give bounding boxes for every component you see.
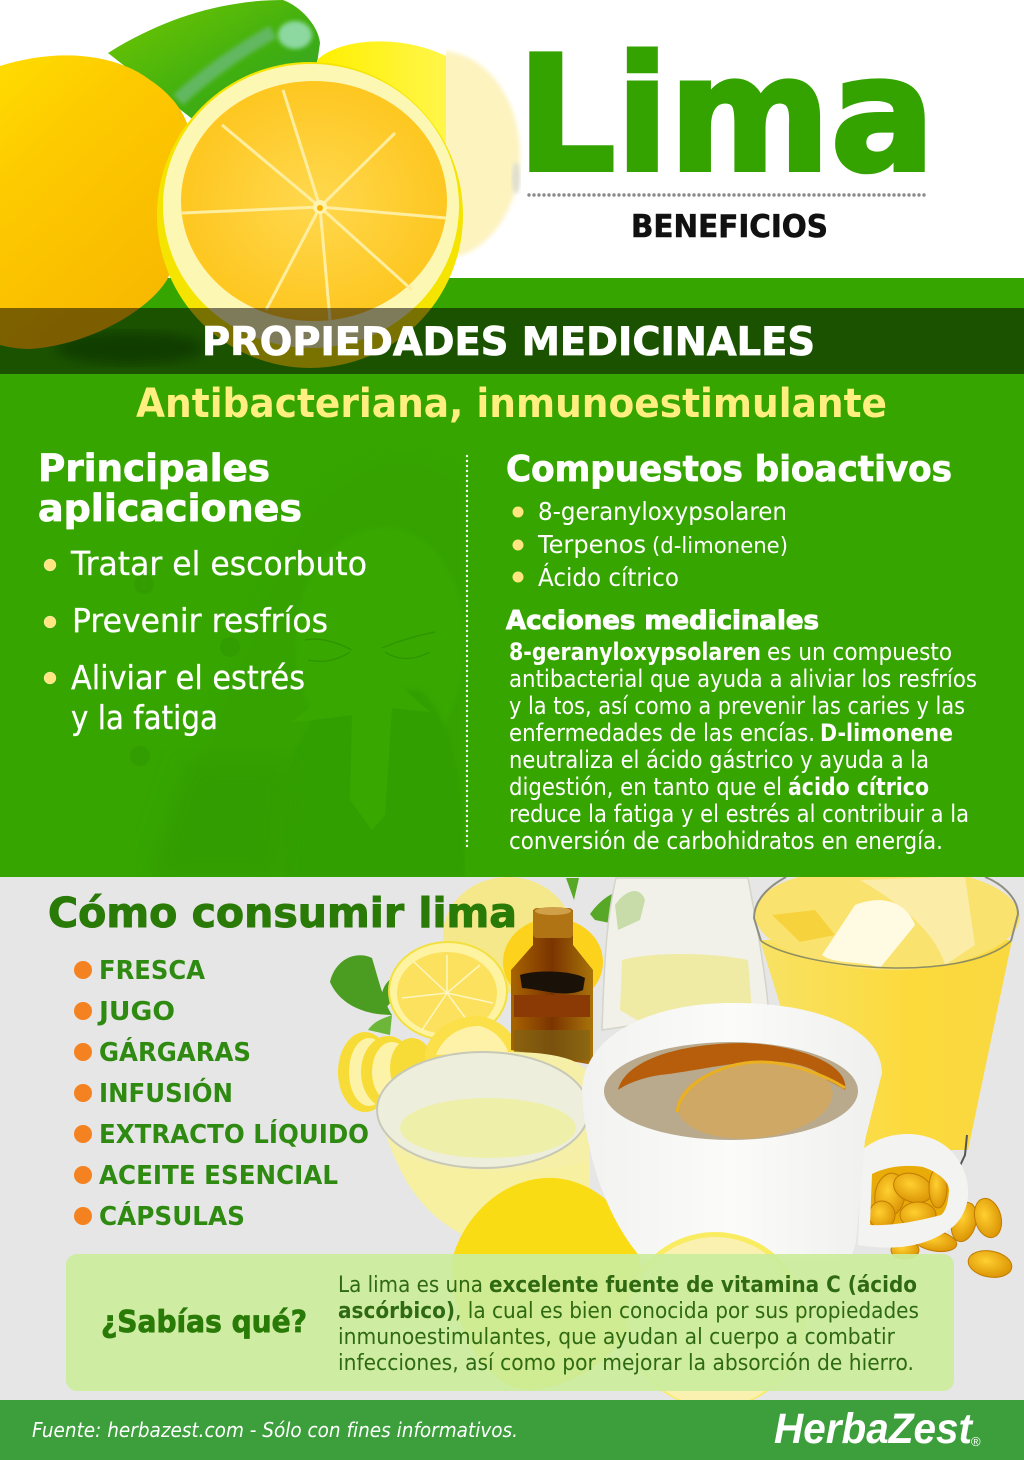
- leaves: [330, 878, 620, 1035]
- leaf: [108, 0, 320, 125]
- list: bioactive compounds: Terpenos: [537, 530, 646, 559]
- panel: medicinal properties green background: [0, 278, 1024, 877]
- photo: sneezing woman silhouette: [144, 592, 435, 765]
- subheading: Antibacteriana, inmunoestimulante: Antibacteriana, inmunoestimulante: [136, 381, 887, 427]
- text block: medicinal actions: ácido cítrico: [788, 773, 929, 801]
- list: main applications: Tratar el escorbuto: [70, 544, 367, 583]
- callout text: infecciones, así como por mejorar la absorción de hierro.: [338, 1351, 914, 1376]
- title: Lima: Lima: [517, 21, 935, 208]
- image: lemons and leaf: [0, 0, 520, 368]
- list: bioactive compounds: Ácido cítrico: [538, 563, 679, 592]
- panel: how to consume background: [0, 877, 1024, 1400]
- footer bar: [0, 1400, 1024, 1460]
- list: consumption forms: ACEITE ESENCIAL: [99, 1161, 338, 1191]
- list: consumption forms: JUGO: [97, 997, 175, 1027]
- glass of lime juice: [754, 866, 1020, 1170]
- list: consumption forms: FRESCA: [99, 956, 205, 986]
- lemon half: [389, 942, 507, 1040]
- list: main applications: [44, 544, 367, 737]
- list: consumption forms: INFUSIÓN: [99, 1077, 233, 1109]
- text block: medicinal actions: reduce la fatiga y el estrés al contribuir a la: [509, 800, 969, 828]
- callout text: inmunoestimulantes, que ayudan al cuerpo a combatir: [338, 1325, 896, 1350]
- list: bioactive compounds: [512, 497, 788, 592]
- text block: medicinal actions: D-limonene: [820, 719, 953, 747]
- back lemon: [443, 877, 573, 993]
- lemon half under mug: [625, 1232, 805, 1408]
- list: consumption forms: EXTRACTO LÍQUIDO: [99, 1118, 369, 1150]
- dotted title divider: [529, 193, 928, 197]
- lemon half: [157, 62, 463, 368]
- callout text: ascórbico): [338, 1299, 455, 1324]
- vertical dotted divider: [466, 456, 468, 850]
- callout text: [338, 1273, 919, 1376]
- text block: medicinal actions: 8-geranyloxypsolaren: [509, 638, 761, 666]
- callout text: La lima es una: [338, 1273, 483, 1298]
- text block: medicinal actions: y la tos, así como a prevenir las caries y las: [509, 692, 965, 720]
- text block: medicinal actions: neutraliza el ácido gástrico y ayuda a la: [509, 746, 929, 774]
- text block: medicinal actions: enfermedades de las encías.: [509, 719, 815, 747]
- amber essential oil bottle: [511, 907, 593, 1065]
- text block: medicinal actions: antibacterial que ayuda a aliviar los resfríos: [509, 665, 977, 693]
- list: consumption forms: GÁRGARAS: [99, 1036, 251, 1068]
- heading: Principales aplicaciones: aplicaciones: [38, 487, 302, 530]
- list: main applications: Aliviar el estrés: [71, 658, 305, 697]
- list: bioactive compounds: 8-geranyloxypsolaren: [538, 497, 787, 526]
- list: bioactive compounds: (d-limonene): [652, 534, 788, 559]
- heading: Principales aplicaciones: Principales: [38, 447, 270, 490]
- whole lemon: [0, 55, 192, 349]
- yellow lemon front: [452, 1178, 642, 1390]
- list: consumption forms: [74, 956, 369, 1232]
- blurred lemon behind: [317, 41, 520, 259]
- subtitle: Beneficios: BENEFICIOS: [631, 209, 828, 245]
- white mug with tea: [582, 1003, 968, 1262]
- callout: did you know: [66, 1254, 954, 1391]
- bowl of juice: [377, 1052, 590, 1235]
- logo: HerbaZest: ®: [971, 1434, 981, 1449]
- footer source text: Fuente: herbazest.com - Sólo con fines informativos.: [32, 1418, 518, 1442]
- text block: medicinal actions: digestión, en tanto que el: [509, 773, 782, 801]
- heading: Propiedades medicinales: PROPIEDADES MEDICINALES: [202, 320, 815, 365]
- heading: Compuestos bioactivos: Compuestos bioactivos: [506, 449, 952, 490]
- callout heading: ¿Sabías qué?: [101, 1305, 307, 1340]
- text block: medicinal actions: [509, 638, 977, 855]
- band: dark title strip: [0, 308, 1024, 374]
- heading: Acciones medicinales: Acciones medicinales: [506, 606, 819, 636]
- text block: medicinal actions: conversión de carbohidratos en energía.: [509, 827, 943, 855]
- image: lime products still life: [330, 866, 1020, 1408]
- logo: HerbaZest: HerbaZest: [774, 1405, 974, 1453]
- shadow of lemon: [55, 332, 205, 364]
- capsules: [865, 1165, 1014, 1281]
- callout text: , la cual es bien conocida por sus propiedades: [455, 1299, 919, 1324]
- list: main applications: Prevenir resfríos: [72, 601, 328, 640]
- list: consumption forms: CÁPSULAS: [99, 1200, 245, 1232]
- lemon slices: [338, 1016, 522, 1112]
- heading: Cómo consumir lima: Cómo consumir lima: [48, 889, 517, 937]
- callout text: excelente fuente de vitamina C (ácido: [489, 1273, 917, 1298]
- list: main applications: y la fatiga: [71, 698, 218, 737]
- text block: medicinal actions: es un compuesto: [767, 638, 952, 666]
- heading: Principales aplicaciones: [38, 447, 302, 530]
- glass bottle: [602, 878, 768, 1030]
